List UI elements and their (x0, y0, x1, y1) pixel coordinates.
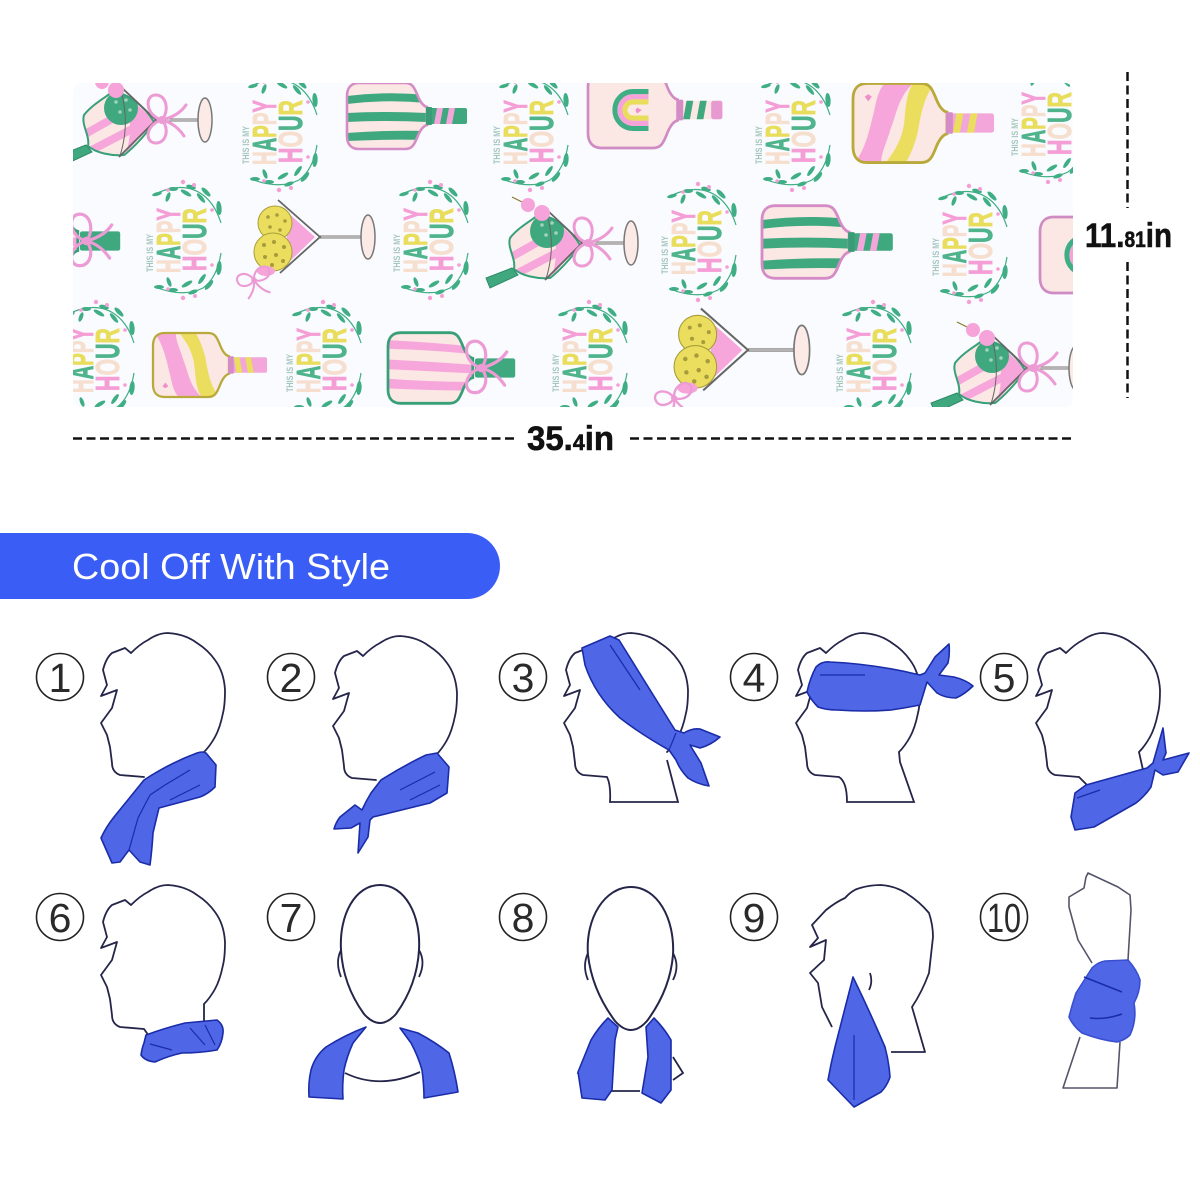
wreath: Happy Hour 12 (836, 300, 912, 407)
wreath: Happy Hour 8: THIS IS MY (931, 238, 941, 276)
panel: towel pattern (73, 83, 1073, 407)
wreath: Happy Hour 11: HAPPY (556, 328, 593, 393)
wreath: Happy Hour 2: HAPPY (497, 100, 534, 165)
wreath: Happy Hour 7: HAPPY (665, 210, 702, 275)
style 5: scarf tied at back of neck: 5 (993, 655, 1015, 701)
wreath: Happy Hour 2 (494, 83, 569, 192)
wreath: Happy Hour 9: HOUR (89, 328, 126, 391)
wreath: Happy Hour 8: HOUR (962, 212, 999, 275)
style 10: wrapped around the wrist (980, 873, 1140, 1088)
style 6: twisted neck band: 6 (49, 895, 71, 941)
wreath: Happy Hour 11: THIS IS MY (551, 354, 561, 392)
martini with paddle, bottom right (930, 322, 1073, 407)
wreath: Happy Hour 1: HAPPY (246, 100, 283, 165)
wreath: Happy Hour 6: HOUR (423, 208, 460, 271)
wreath: Happy Hour 10: HAPPY (290, 328, 327, 393)
wreath: Happy Hour 1: HOUR (272, 100, 309, 163)
heading banner (0, 533, 500, 599)
wreath: Happy Hour 4: HAPPY (1015, 92, 1052, 157)
wreath: Happy Hour 5: THIS IS MY (145, 234, 155, 272)
wreath: Happy Hour 6 (392, 180, 469, 300)
wreath: Happy Hour 7 (660, 182, 737, 302)
style 6: twisted neck band (36, 885, 225, 1062)
wreath: Happy Hour 3: HOUR (785, 100, 822, 163)
wreath: Happy Hour 5 (145, 180, 222, 300)
style 7: draped over shoulders, front view (268, 885, 458, 1099)
style 9: scarf covering face like a mask (730, 885, 933, 1107)
wreath: Happy Hour 3: HAPPY (759, 100, 796, 165)
paddle: pink and yellow swirl, top row (853, 83, 994, 163)
martini with pickleballs, bottom (654, 308, 810, 407)
paddle: green stripes, top row (347, 83, 467, 149)
wreath: Happy Hour 3 (756, 83, 831, 192)
paddle: rainbow, right edge (1038, 216, 1073, 294)
style 2: scarf tied at front: 2 (280, 655, 302, 701)
style 2: scarf tied at front (268, 636, 457, 853)
wreath: Happy Hour 7: THIS IS MY (660, 236, 670, 274)
wreath: Happy Hour 12: HOUR (866, 328, 903, 391)
wreath: Happy Hour 10: THIS IS MY (285, 354, 295, 392)
paddle: green stripes, middle row (762, 206, 893, 278)
wreath: Happy Hour 11 (552, 300, 628, 407)
wreath: Happy Hour 2: HOUR (523, 100, 560, 163)
wreath: Happy Hour 8: HAPPY (936, 212, 973, 277)
style 1: scarf around neck, tails hanging (36, 633, 225, 865)
style 4: straight headband: 4 (743, 655, 765, 701)
style 9: scarf covering face like a mask: 9 (743, 895, 765, 941)
dimension: width 35.4in: 35.4in (527, 420, 614, 458)
style 5: scarf tied at back of neck (980, 633, 1189, 830)
style 4: straight headband (730, 633, 973, 802)
wreath: Happy Hour 6: THIS IS MY (392, 234, 402, 272)
wreath: Happy Hour 3: THIS IS MY (754, 126, 764, 164)
wreath: Happy Hour 10: HOUR (316, 328, 353, 391)
dimension: height 11.81in: 11.81in (1085, 217, 1172, 255)
style 3: diagonal headband (500, 633, 720, 802)
wreath: Happy Hour 4: THIS IS MY (1010, 118, 1020, 156)
wreath: Happy Hour 8 (931, 184, 1008, 304)
martini with pickleballs, middle (236, 200, 375, 301)
style 8: hanging down from neck, front view: 8 (512, 895, 534, 941)
paddle: pink stripes handle, left edge (73, 212, 120, 268)
martini with paddle, middle (486, 197, 638, 288)
wreath: Happy Hour 7: HOUR (691, 210, 728, 273)
wreath: Happy Hour 12: HAPPY (840, 328, 877, 393)
wreath: Happy Hour 11: HOUR (582, 328, 619, 391)
paddle: pink stripes, bottom row (388, 333, 515, 403)
wreath: Happy Hour 9: THIS IS MY (58, 354, 68, 392)
wreath: Happy Hour 9 (73, 300, 135, 407)
wreath: Happy Hour 9: HAPPY (63, 328, 100, 393)
style 10: wrapped around the wrist: 10 (987, 895, 1021, 941)
wreath: Happy Hour 4 (1012, 83, 1073, 184)
wreath: Happy Hour 10 (286, 300, 362, 407)
style 3: diagonal headband: 3 (512, 655, 534, 701)
heading banner: Cool Off With Style (72, 546, 390, 587)
wreath: Happy Hour 6: HAPPY (397, 208, 434, 273)
wreath: Happy Hour 1 (242, 83, 318, 192)
wreath: Happy Hour 12: THIS IS MY (835, 354, 845, 392)
style 7: draped over shoulders, front view: 7 (280, 895, 302, 941)
wreath: Happy Hour 5: HAPPY (150, 208, 187, 273)
martini with paddle, top left (73, 83, 213, 162)
style 1: scarf around neck, tails hanging: 1 (49, 655, 71, 701)
paddle: pink and yellow swirl, bottom row (153, 333, 267, 397)
wreath: Happy Hour 4: HOUR (1041, 92, 1078, 155)
wreath: Happy Hour 5: HOUR (176, 208, 213, 271)
wreath: Happy Hour 2: THIS IS MY (492, 126, 502, 164)
style 8: hanging down from neck, front view (500, 887, 683, 1103)
paddle: rainbow, top row (586, 83, 722, 150)
wreath: Happy Hour 1: THIS IS MY (241, 126, 251, 164)
